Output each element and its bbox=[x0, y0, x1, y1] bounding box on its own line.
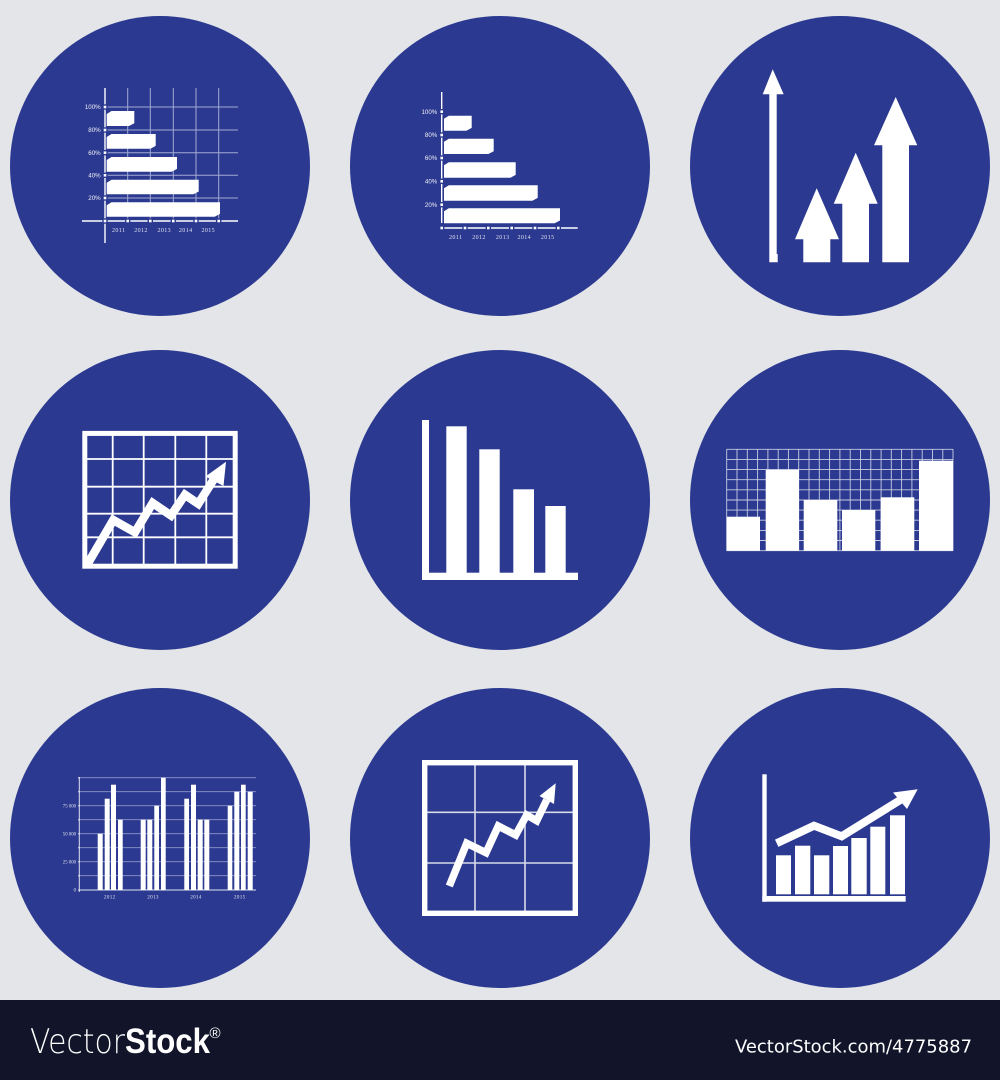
icon: grouped bar chart by year: 2013 bbox=[147, 894, 159, 900]
icon: line chart with dense frame grid bbox=[10, 350, 310, 650]
icon: percent bar chart without grid: 40% bbox=[425, 178, 438, 186]
icon: percent bar chart without grid: 80% bbox=[425, 132, 438, 139]
icon: percent bar chart with grid: 2011 bbox=[112, 228, 125, 234]
icon: percent bar chart with grid: 2012 bbox=[134, 228, 148, 234]
footer registered mark: ® bbox=[210, 1025, 221, 1042]
icon: percent bar chart with grid: 2013 bbox=[157, 228, 171, 234]
icon: grouped bar chart by year: 0 bbox=[74, 888, 77, 893]
footer bar bbox=[0, 1000, 1000, 1080]
icon: percent bar chart with grid: 60% bbox=[88, 150, 101, 157]
footer image id: VectorStock.com/4775887 bbox=[735, 1037, 972, 1058]
icon: rising arrows bbox=[690, 16, 990, 316]
icon: percent bar chart with grid: 80% bbox=[88, 127, 101, 134]
icon: percent bar chart without grid: 2013 bbox=[496, 235, 510, 241]
icon: percent bar chart with grid: 2015 bbox=[201, 228, 215, 234]
icon: percent bar chart with grid: 2014 bbox=[179, 228, 193, 234]
icon: grouped bar chart by year: 2015 bbox=[234, 894, 246, 900]
footer logo: VectorStock bbox=[30, 1022, 210, 1062]
icon: percent bar chart with grid bbox=[10, 16, 310, 316]
icon: percent bar chart without grid: 2011 bbox=[449, 235, 462, 241]
icon: percent bar chart without grid: 100% bbox=[421, 109, 438, 116]
icon: percent bar chart without grid: 2015 bbox=[541, 235, 555, 241]
icon: grouped bar chart by year: 75 000 bbox=[63, 804, 77, 809]
icon: percent bar chart with grid: 20% bbox=[88, 195, 101, 202]
icon: descending bar chart bbox=[350, 350, 650, 650]
icon: grouped bar chart by year: 25 000 bbox=[63, 860, 77, 865]
icon: percent bar chart without grid bbox=[350, 16, 650, 316]
icon: line chart with coarse frame grid bbox=[350, 688, 650, 988]
icon: percent bar chart without grid: 2012 bbox=[472, 235, 486, 241]
icon: percent bar chart with grid: 40% bbox=[88, 172, 101, 180]
icon: grouped bar chart by year: 2012 bbox=[104, 894, 116, 900]
icon: grouped bar chart by year bbox=[10, 688, 310, 988]
icon: percent bar chart without grid: 60% bbox=[425, 155, 438, 162]
icon: bars over fine grid bbox=[690, 350, 990, 650]
icon: percent bar chart without grid: 20% bbox=[425, 202, 438, 209]
icon: percent bar chart without grid: 2014 bbox=[517, 235, 531, 241]
icon: grouped bar chart by year: 50 000 bbox=[63, 832, 77, 837]
icon: grouped bar chart by year: 2014 bbox=[190, 894, 202, 900]
icon: bars with trend arrow bbox=[690, 688, 990, 988]
icon: percent bar chart with grid: 100% bbox=[85, 104, 101, 111]
